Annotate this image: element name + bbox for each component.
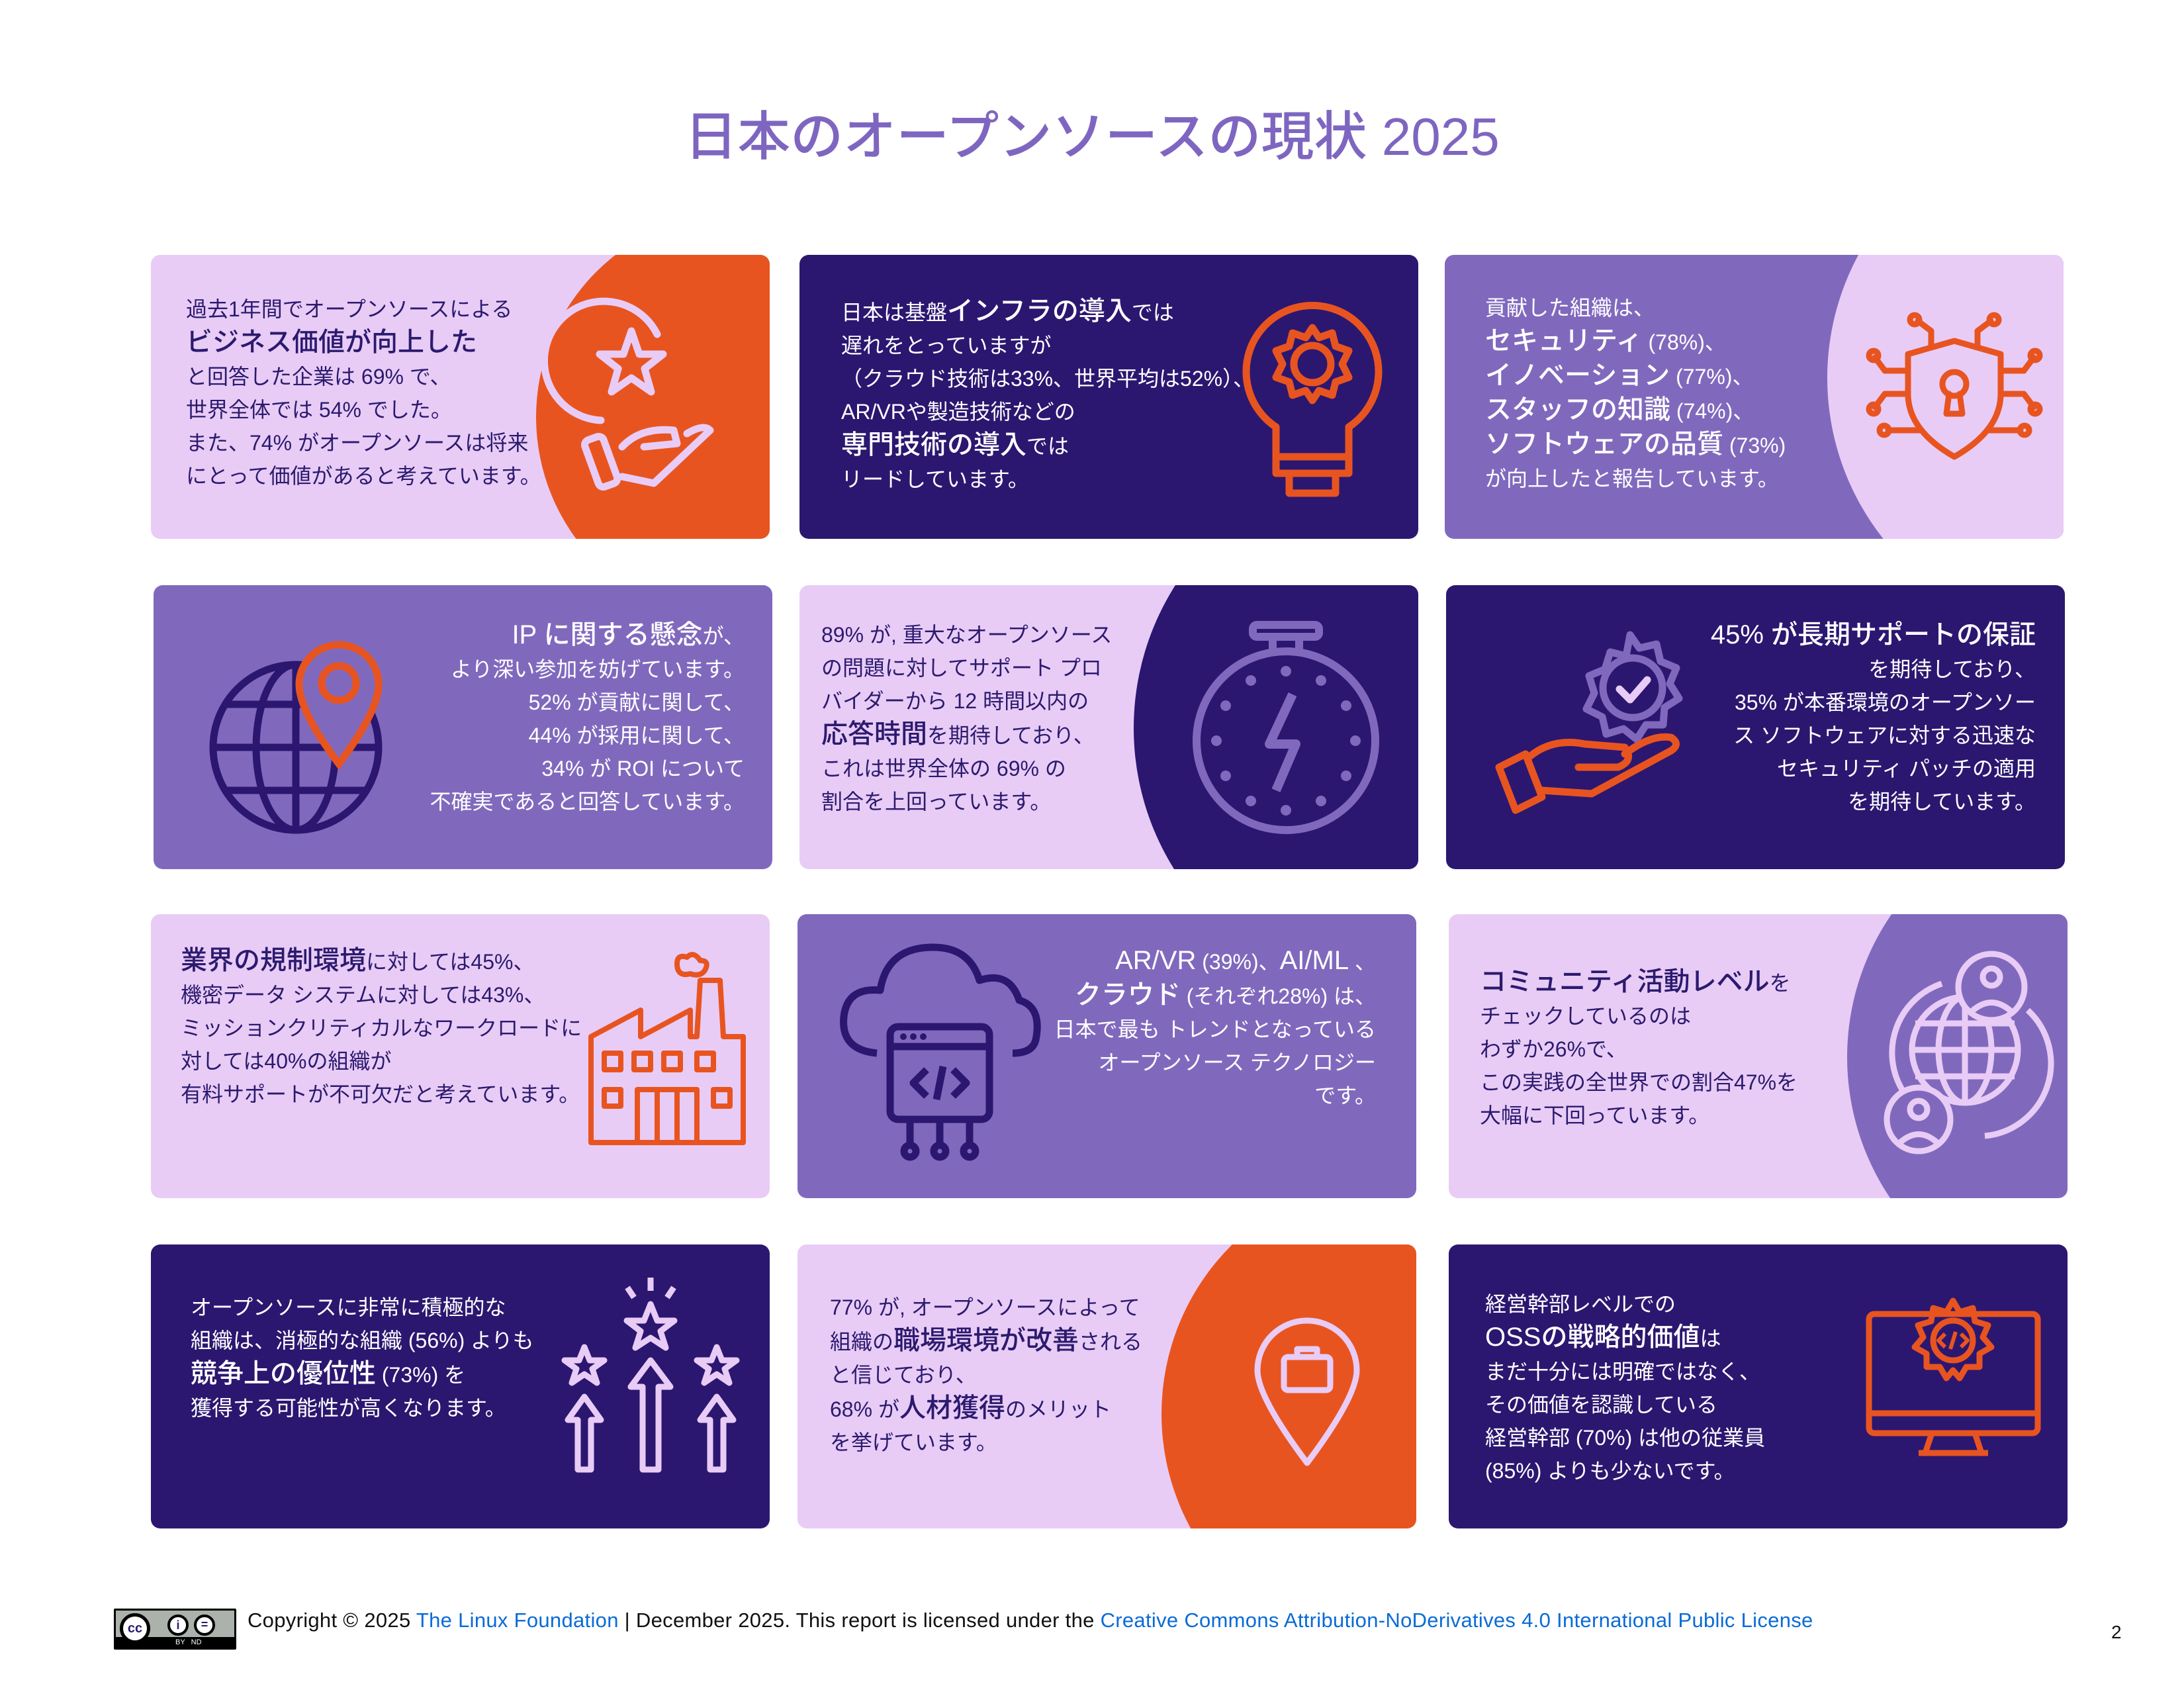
text: long-term support: を期待しており、 — [1868, 657, 2036, 681]
text: infrastructure: （クラウド技術は33%、世界平均は52%）、 — [841, 367, 1254, 391]
text: infrastructure: 遅れをとっていますが — [841, 334, 1051, 357]
text: long-term support: セキュリティ パッチの適用 — [1777, 757, 2036, 780]
panel: support response — [799, 585, 1418, 869]
text: paid support: 対しては40%の組織が — [181, 1049, 391, 1073]
text: community activity: わずか26%で、 — [1480, 1037, 1627, 1061]
text: workplace: 組織の職場環境が改善される — [830, 1326, 1142, 1355]
icon: cc by-nd badge: = — [201, 1618, 208, 1631]
page number: 2 — [2111, 1622, 2122, 1642]
panel: trending technologies — [797, 914, 1416, 1198]
text: business value: 過去1年間でオープンソースによる — [186, 297, 512, 321]
text: paid support: ミッションクリティカルなワークロードに — [181, 1016, 582, 1040]
text: trending technologies: オープンソース テクノロジー — [1099, 1051, 1376, 1074]
text: long-term support: 45% が長期サポートの保証 — [1711, 620, 2036, 649]
text: business value — [186, 297, 541, 488]
text: contribution benefits: スタッフの知識 (74%)、 — [1485, 395, 1754, 424]
text: long-term support: を期待しています。 — [1848, 790, 2036, 814]
icon: pin briefcase — [1255, 1317, 1359, 1466]
text: IP concerns: 不確実であると回答しています。 — [430, 790, 745, 814]
text: trending technologies: クラウド (それぞれ28%) は、 — [1075, 980, 1376, 1009]
text: infrastructure: リードしています。 — [841, 467, 1029, 491]
panel: IP concerns — [154, 585, 772, 869]
text: community activity: 大幅に下回っています。 — [1480, 1103, 1709, 1127]
panel: workplace — [797, 1244, 1416, 1528]
text: business value: と回答した企業は 69% で、 — [186, 365, 451, 389]
text: competitive advantage — [191, 1295, 534, 1420]
icon: cloud chip — [840, 944, 1041, 1161]
text: competitive advantage: 獲得する可能性が高くなります。 — [191, 1396, 506, 1420]
text: contribution benefits: セキュリティ (78%)、 — [1485, 326, 1726, 355]
panel: community activity — [1449, 914, 2068, 1198]
text: community activity: コミュニティ活動レベルを — [1480, 967, 1791, 996]
text: support response: の問題に対してサポート プロ — [821, 656, 1102, 680]
panel: competitive advantage — [151, 1244, 770, 1528]
panel: business value — [151, 255, 770, 539]
text: infrastructure: 日本は基盤インフラの導入では — [841, 297, 1174, 326]
text: trending technologies: AR/VR (39%)、AI/ML 、 — [1115, 946, 1376, 975]
text: long-term support: ス ソフトウェアに対する迅速な — [1733, 724, 2036, 747]
text: IP concerns: 44% が採用に関して、 — [529, 724, 745, 747]
text: contribution benefits: イノベーション (77%)、 — [1485, 361, 1753, 390]
text: support response: 応答時間を期待しており、 — [821, 720, 1095, 749]
text: contribution benefits: 貢献した組織は、 — [1485, 296, 1655, 320]
text: copyright: Copyright © 2025 The Linux Foundation | December 2025. This report is licensed under the Creative Commons Attribution-NoDerivatives 4.0 International Public License — [248, 1609, 1813, 1632]
icon: star in hand — [541, 298, 713, 491]
text: IP concerns: IP に関する懸念が、 — [512, 620, 745, 649]
text: paid support: 機密データ システムに対しては43%、 — [181, 983, 545, 1007]
panel: contribution benefits — [1445, 255, 2064, 539]
text: competitive advantage: 組織は、消極的な組織 (56%) よりも — [191, 1329, 534, 1352]
text: contribution benefits — [1485, 296, 1786, 491]
text: paid support — [181, 946, 582, 1106]
text: competitive advantage: 競争上の優位性 (73%) を — [191, 1359, 465, 1388]
text: IP concerns: 52% が貢献に関して、 — [529, 690, 745, 714]
text: trending technologies: 日本で最も トレンドとなっている — [1054, 1017, 1376, 1041]
text: support response: これは世界全体の 69% の — [821, 757, 1066, 780]
icon: globe with pin — [209, 641, 383, 834]
icon: stopwatch — [1193, 621, 1379, 834]
text: executive value: OSSの戦略的価値は — [1485, 1323, 1721, 1352]
text: paid support: 有料サポートが不可欠だと考えています。 — [181, 1082, 580, 1106]
icon: cc by-nd badge: BY ND — [175, 1638, 202, 1646]
text: contribution benefits: が向上したと報告しています。 — [1485, 467, 1779, 491]
text: workplace: 68% が人材獲得のメリット — [830, 1393, 1111, 1423]
text: executive value — [1485, 1292, 1765, 1483]
text: business value: ビジネス価値が向上した — [186, 328, 477, 357]
text: executive value: (85%) よりも少ないです。 — [1485, 1459, 1735, 1483]
icon: cc by-nd badge: cc — [128, 1621, 142, 1636]
text: community activity: チェックしているのは — [1480, 1004, 1691, 1028]
text: business value: にとって価値があると考えています。 — [186, 464, 541, 488]
title: 日本のオープンソースの現状 2025 — [684, 107, 1500, 166]
panel: paid support — [151, 914, 770, 1198]
text: IP concerns: 34% が ROI について — [541, 757, 745, 780]
text: infrastructure — [841, 297, 1254, 491]
text: trending technologies — [1054, 946, 1376, 1107]
text: workplace — [830, 1295, 1142, 1454]
text: competitive advantage: オープンソースに非常に積極的な — [191, 1295, 506, 1319]
text: support response: バイダーから 12 時間以内の — [821, 689, 1089, 713]
text: community activity — [1480, 967, 1797, 1127]
text: paid support: 業界の規制環境に対しては45%、 — [181, 946, 534, 975]
text: workplace: 77% が, オープンソースによって — [830, 1295, 1140, 1319]
text: workplace: と信じており、 — [830, 1363, 977, 1387]
icon: gear check hand — [1496, 632, 1682, 814]
icon: stars arrows — [561, 1278, 740, 1472]
text: executive value: その価値を認識している — [1485, 1393, 1717, 1417]
text: executive value: 経営幹部レベルでの — [1485, 1292, 1676, 1316]
icon: factory — [588, 952, 746, 1145]
text: workplace: を挙げています。 — [830, 1430, 997, 1454]
footer: license — [114, 1609, 1813, 1650]
text: support response: 割合を上回っています。 — [821, 790, 1051, 814]
panel: long-term support — [1446, 585, 2065, 869]
icon: lightbulb gear — [1243, 302, 1382, 496]
text: business value: 世界全体では 54% でした。 — [186, 398, 452, 422]
text: executive value: 経営幹部 (70%) は他の従業員 — [1485, 1426, 1765, 1450]
text: executive value: まだ十分には明確ではなく、 — [1485, 1360, 1760, 1383]
icon: globe people — [1884, 951, 2054, 1154]
text: infrastructure: AR/VRや製造技術などの — [841, 400, 1075, 424]
text: community activity: この実践の全世界での割合47%を — [1480, 1070, 1797, 1094]
text: support response: 89% が, 重大なオープンソース — [821, 623, 1112, 647]
text: support response — [821, 623, 1112, 814]
icon: monitor code gear — [1866, 1297, 2041, 1456]
icon: shield network — [1866, 312, 2042, 459]
icon: cc by-nd badge: i — [176, 1618, 180, 1632]
icon: cc by-nd badge — [114, 1609, 236, 1650]
text: business value: また、74% がオープンソースは将来 — [186, 431, 528, 455]
text: long-term support: 35% が本番環境のオープンソー — [1735, 690, 2036, 714]
panel: infrastructure — [799, 255, 1418, 539]
text: trending technologies: です。 — [1314, 1084, 1376, 1107]
text: contribution benefits: ソフトウェアの品質 (73%) — [1485, 430, 1786, 459]
text: infrastructure: 専門技術の導入では — [841, 430, 1069, 459]
panel: executive value — [1449, 1244, 2068, 1528]
text: long-term support — [1711, 620, 2036, 814]
text: IP concerns — [430, 620, 745, 814]
text: IP concerns: より深い参加を妨げています。 — [451, 657, 745, 681]
